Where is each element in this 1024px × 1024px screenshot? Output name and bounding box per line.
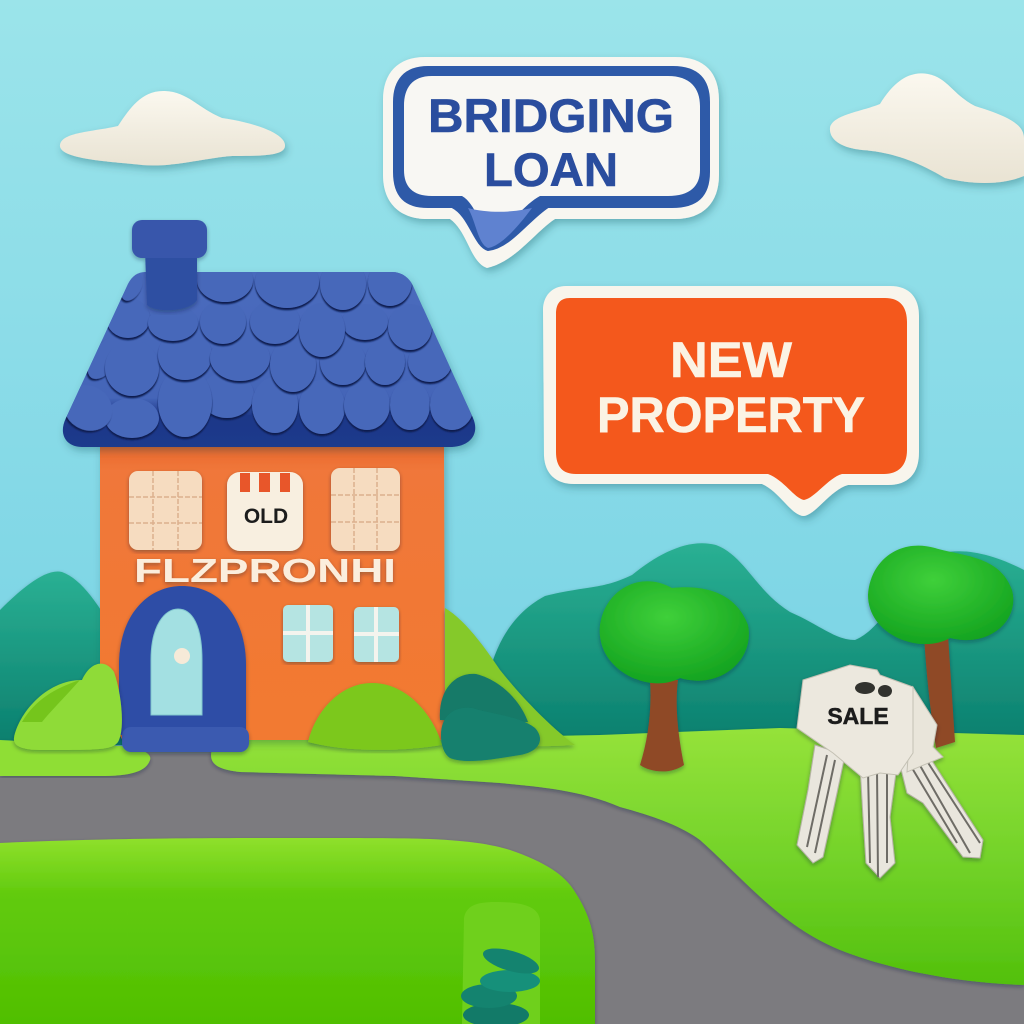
cloud right (830, 73, 1024, 183)
hills (0, 543, 1024, 745)
cloud left (60, 91, 285, 166)
tree: left (600, 581, 749, 771)
lawn: foreground (0, 838, 595, 1024)
hillock beside house (445, 608, 575, 746)
lawn: upper left (0, 740, 150, 776)
bush: dark (440, 674, 540, 761)
window sign: old: OLD (244, 505, 288, 528)
lawn: upper right (211, 728, 1024, 985)
house (55, 220, 475, 752)
heading: new property: PROPERTY (597, 387, 865, 443)
window: left (129, 471, 202, 550)
garden path element (461, 902, 542, 1024)
bush: middle (308, 683, 442, 750)
window: lower right (354, 607, 399, 662)
heading: bridging loan: BRIDGING (428, 89, 674, 142)
roof (55, 256, 475, 447)
window: lower left (283, 605, 333, 662)
key head: front (797, 665, 913, 778)
heading: bridging loan: LOAN (484, 143, 618, 196)
window sign: old (227, 472, 303, 551)
heading: new property: NEW (670, 332, 793, 388)
house wall (100, 440, 445, 745)
key blade: left (797, 745, 845, 863)
key head: back (907, 687, 943, 772)
speech bubble: new property (543, 286, 919, 516)
keys with sale tag (797, 665, 983, 878)
road (0, 752, 1024, 1024)
window: right (331, 468, 400, 551)
key blade: right (900, 750, 983, 858)
chimney (132, 220, 207, 310)
sale label: SALE (827, 703, 889, 729)
door (119, 586, 249, 752)
tree: right (868, 546, 1013, 748)
speech bubble: bridging loan (383, 57, 719, 268)
wall lettering: FLZPRONHI (134, 552, 396, 589)
bush: left (14, 664, 122, 750)
heading: bridging loan (428, 89, 674, 196)
heading: new property (597, 332, 865, 443)
key blade: middle (860, 765, 897, 878)
